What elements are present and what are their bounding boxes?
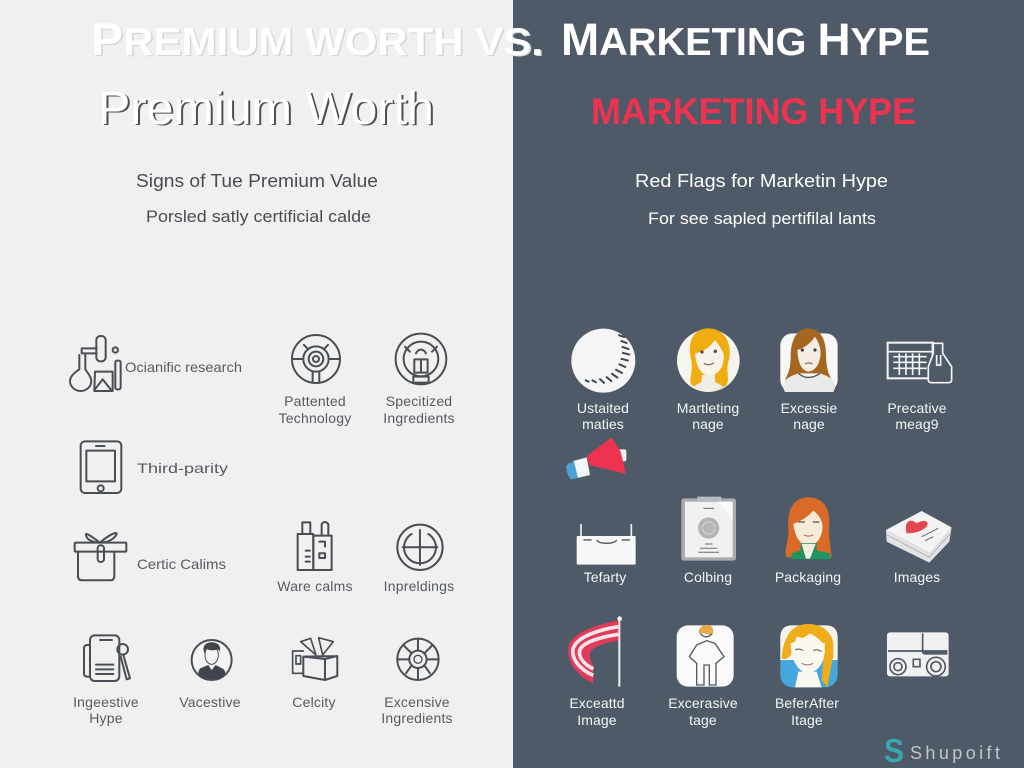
icon: patented technology wheel (292, 335, 340, 383)
icon: excessive ingredients wheel (397, 639, 439, 680)
label: precative image: Precative (887, 400, 947, 416)
label: marketing image (677, 400, 739, 432)
icon: megaphone (566, 437, 626, 479)
label: unstated matters: Ustaited (577, 400, 629, 416)
title: PREMIUM WORTH VS. (92, 15, 544, 66)
text: left tagline: Porsled satly certificial calde (146, 207, 371, 226)
heading: premium worth: Premium Worth (98, 82, 434, 134)
title (91, 14, 930, 66)
logo: shupoift: S (884, 732, 904, 768)
subheading: left: Signs of Tue Premium Value (136, 171, 378, 191)
label: ingestive hype: Ingeestive (73, 694, 139, 710)
label: exceeded image: Exceattd (569, 695, 625, 711)
label: images: Images (894, 569, 940, 585)
label: before/after image: BeferAfter (775, 695, 839, 711)
label: exceeded image (569, 695, 625, 728)
label: vacestive: Vacestive (179, 694, 241, 710)
logo: shupoift: Shupoift (910, 743, 1000, 763)
icon: router (577, 524, 636, 565)
icon: baseball (571, 329, 635, 393)
title: MARKETING HYPE (561, 14, 930, 65)
label: ingredients: Inpreldings (384, 578, 454, 594)
label: precative image: meag9 (895, 416, 939, 432)
label: packaging: Packaging (775, 569, 841, 585)
label: ingestive hype (73, 694, 139, 726)
icon: cassette device (887, 632, 949, 676)
label: patented technology (279, 393, 351, 426)
label: excensive ingredients: Excensive (384, 694, 450, 710)
label: marketing image: Martleting (677, 400, 739, 416)
label: patented technology: Technology (279, 410, 351, 426)
label: excessive image (668, 695, 738, 728)
label: specialized ingredients: Specitized (386, 393, 452, 409)
subheading: right: Red Flags for Marketin Hype (635, 171, 888, 191)
label: celcity: Celcity (292, 694, 336, 710)
label: excensive ingredients: Ingredients (381, 710, 453, 726)
panel: marketing hype background (513, 0, 1024, 768)
label: precative image (887, 400, 947, 432)
title: PREMIUM WORTH VS. (91, 14, 543, 65)
icon: lab flask (70, 336, 121, 391)
icon: open box (293, 638, 337, 680)
label: before/after image: Itage (791, 712, 823, 728)
label: unstated matters: maties (582, 416, 624, 432)
label: excessive image: Excerasive (668, 695, 738, 711)
icon: man portrait (192, 640, 232, 680)
label: excensive ingredients (381, 694, 453, 726)
icon: red-haired woman (786, 497, 832, 559)
icon: phone and magnifier (84, 635, 130, 681)
icon: tablet (81, 441, 121, 493)
label: specialized ingredients: Ingredients (383, 410, 455, 426)
label: before/after image (775, 695, 839, 728)
heading: premium worth: Premium Worth (100, 83, 436, 135)
label: excessive image: nage (793, 416, 825, 432)
icon: calendar and bottle (888, 343, 952, 383)
label: patented technology: Pattented (284, 393, 346, 409)
icon: before and after woman (780, 624, 838, 687)
label: marketing image: nage (692, 416, 724, 432)
icon: specialized ingredients wheel (396, 334, 446, 384)
icon: gift box (75, 533, 126, 580)
icon: clipboard (681, 497, 736, 561)
label: scientific research: Ocianific research (125, 359, 242, 375)
label: ware claims: Ware calms (277, 578, 353, 594)
text: right tagline: For see sapled pertifilal lants (648, 209, 876, 228)
logo: shupoift (884, 732, 1000, 768)
icon: bottles (298, 522, 332, 570)
icon: man illustration tile (677, 625, 734, 687)
icon: blonde woman (677, 328, 740, 392)
label: third-party: Third-parity (137, 460, 228, 476)
panel: premium worth background (0, 0, 513, 768)
label: excessive image: tage (689, 712, 717, 728)
label: colbing: Colbing (684, 569, 732, 585)
label: exceeded image: Image (577, 712, 617, 728)
icon: brunette woman (780, 328, 838, 392)
icon: stacked book with heart (886, 511, 952, 563)
label: unstated matters (577, 400, 629, 432)
label: tefarty: Tefarty (584, 569, 626, 585)
icon: crosshair (397, 525, 443, 570)
label: excessive image: Excessie (781, 400, 838, 416)
label: ingestive hype: Hype (89, 710, 123, 726)
label: excessive image (781, 400, 838, 432)
label: specialized ingredients (383, 393, 455, 426)
label: certified claims: Certic Calims (137, 556, 226, 572)
heading: marketing hype: MARKETING HYPE (591, 91, 916, 132)
icon: striped flag (568, 616, 622, 687)
